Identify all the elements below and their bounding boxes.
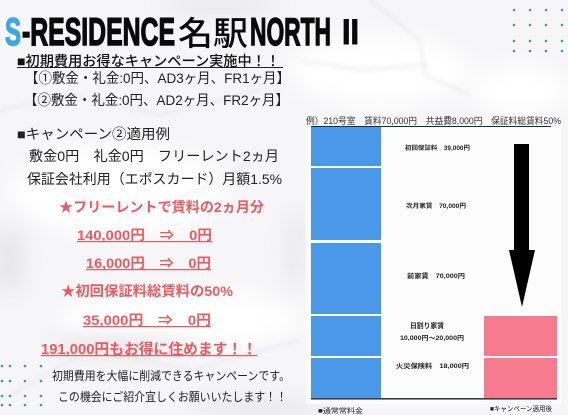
chart panel (306, 115, 561, 415)
label: next month rent: 次月家賃 70,000円 (406, 202, 466, 210)
title: NORTH (250, 11, 331, 54)
initial guarantee highlight: ★初回保証料総賃料の50% (61, 283, 234, 299)
decorative dots: bottom left (1, 365, 42, 406)
label: advance rent: 前家賃 70,000円 (407, 271, 466, 280)
label: prorated rent: 10,000円～20,000円 (400, 334, 465, 342)
label: initial guarantee: 初回保証料 39,000円 (405, 144, 470, 152)
title: S (5, 11, 21, 54)
chart caption: 例）210号室 賃料70,000円 共益費8,000円 保証料総賃料50% (306, 115, 561, 126)
guarantee terms: 保証会社利用（エポスカード）月額1.5% (27, 171, 282, 187)
label: prorated rent (400, 321, 465, 342)
title (5, 11, 359, 54)
saving: 140,000: 140,000円 ⇒ 0円 (77, 227, 212, 243)
baseline (311, 398, 557, 400)
legend: standard: ■通常常料金 (318, 406, 363, 415)
label: prorated rent: 日割り家賃 (410, 321, 444, 330)
decorative dots: top right (513, 9, 563, 52)
free rent highlight: ★フリーレントで賃料の2ヵ月分 (59, 199, 264, 215)
campaign option 1: 【①敷金・礼金:0円、AD3ヶ月、FR1ヶ月】 (25, 70, 290, 86)
campaign option 2: 【②敷金・礼金:0円、AD2ヶ月、FR2ヶ月】 (24, 92, 289, 108)
title: -RESIDENCE (22, 11, 175, 54)
legend: campaign: ■キャンペーン適用後 (490, 404, 552, 413)
bar: campaign fees (484, 316, 557, 398)
campaign heading: ■初期費用お得なキャンペーン実施中！！ (17, 53, 280, 69)
total saving: 191,000円もお得に住めます！！ (41, 340, 257, 358)
saving: 35,000: 35,000円 ⇒ 0円 (83, 312, 211, 328)
title: II (342, 13, 359, 52)
bar: standard fees (311, 127, 381, 398)
top axis line (311, 126, 551, 127)
closing line 1: 初期費用を大幅に削減できるキャンペーンです。 (52, 368, 290, 383)
example terms: 敷金0円 礼金0円 フリーレント2ヵ月 (29, 148, 279, 164)
arrow (509, 144, 535, 307)
label: fire insurance: 火災保険料 18,000円 (396, 361, 470, 370)
title: 名駅 (178, 15, 248, 52)
closing line 2: この機会にご紹介宜しくお願いいたします！！ (58, 389, 287, 404)
example heading: ■キャンペーン②適用例 (17, 126, 170, 142)
saving: 16,000: 16,000円 ⇒ 0円 (86, 255, 211, 271)
